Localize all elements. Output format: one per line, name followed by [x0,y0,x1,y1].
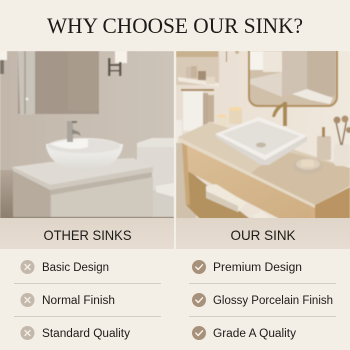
vase with dried flowers [334,116,350,166]
heading band: our sink: OUR SINK [230,227,296,243]
row: basic design: Basic Design [42,262,109,274]
heading band: other sinks: OTHER SINKS [44,227,132,243]
towel rail and towels [176,89,214,142]
row: grade a quality: Grade A Quality [213,328,296,340]
marble countertop [178,122,350,208]
countertop [12,158,153,190]
cabinet body [0,170,174,219]
wall sconce [0,51,127,76]
wall niche with jars [176,51,219,87]
heading band: other sinks [0,218,174,249]
row: basic design [20,260,109,274]
photo: other sink bathroom [0,51,174,219]
title: WHY CHOOSE OUR SINK? [47,13,303,38]
faucet [67,121,81,142]
row: grade a quality [192,326,296,340]
row: standard quality: Standard Quality [42,328,130,340]
folded towels [205,184,240,212]
row: normal finish: Normal Finish [42,295,115,307]
candles [217,107,242,127]
soap dish [296,158,320,170]
heading band: our sink [176,218,350,249]
panel: other sinks [0,218,174,340]
mirror [249,43,337,106]
row: normal finish [20,293,115,307]
panel: our sink [176,218,350,340]
vessel sink [46,138,124,163]
photo: our sink bathroom [176,43,350,219]
gold faucet [272,102,287,126]
mirror [18,51,99,115]
row: premium design [192,260,302,274]
row: premium design: Premium Design [213,262,302,274]
vanity wood [176,143,350,219]
soap dispenser [317,127,331,160]
wall hooks [226,50,239,62]
row: standard quality [20,326,130,340]
toilet [137,138,174,219]
square vessel sink [215,117,307,165]
row: glossy porcelain finish: Glossy Porcelain Finish [213,295,333,307]
